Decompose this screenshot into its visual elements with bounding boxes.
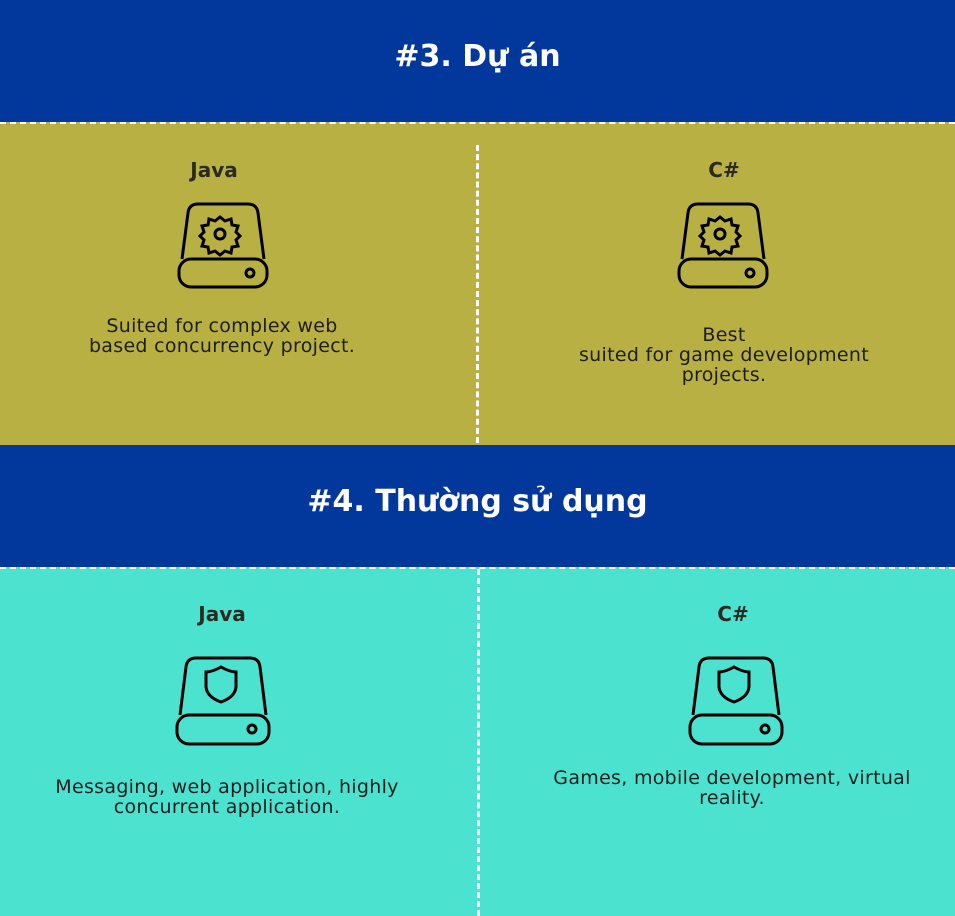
icon: gear drive c# — [678, 202, 768, 288]
text: c# usage: Games, mobile development, virtual — [553, 767, 911, 789]
text: java projects — [89, 315, 355, 357]
label: Java: Java — [190, 158, 238, 182]
text: c# projects: Best — [702, 324, 746, 346]
icon: shield drive c# — [688, 656, 784, 746]
text: java usage: Messaging, web application, highly — [55, 776, 399, 798]
label: C#: C# — [708, 158, 740, 182]
panel: usage — [0, 567, 955, 916]
header band: usage — [0, 445, 955, 567]
icon: shield drive java — [176, 656, 270, 746]
header band: projects — [0, 0, 955, 122]
text: c# projects — [579, 324, 869, 386]
label: Java: Java — [198, 602, 246, 626]
text: c# usage: reality. — [699, 787, 765, 809]
panel: projects — [0, 122, 955, 445]
text: c# projects: suited for game development — [579, 344, 869, 366]
heading: #3: #3. Dự án — [394, 39, 561, 74]
text: java usage — [55, 776, 399, 818]
text: c# usage — [553, 767, 911, 809]
label: C#: C# — [717, 602, 749, 626]
text: c# projects: projects. — [682, 364, 766, 386]
text: java projects: based concurrency project. — [89, 335, 355, 357]
text: java usage: concurrent application. — [114, 796, 340, 818]
icon: gear drive java — [178, 202, 268, 288]
text: java projects: Suited for complex web — [106, 315, 338, 337]
heading: #4: #4. Thường sử dụng — [307, 484, 648, 519]
